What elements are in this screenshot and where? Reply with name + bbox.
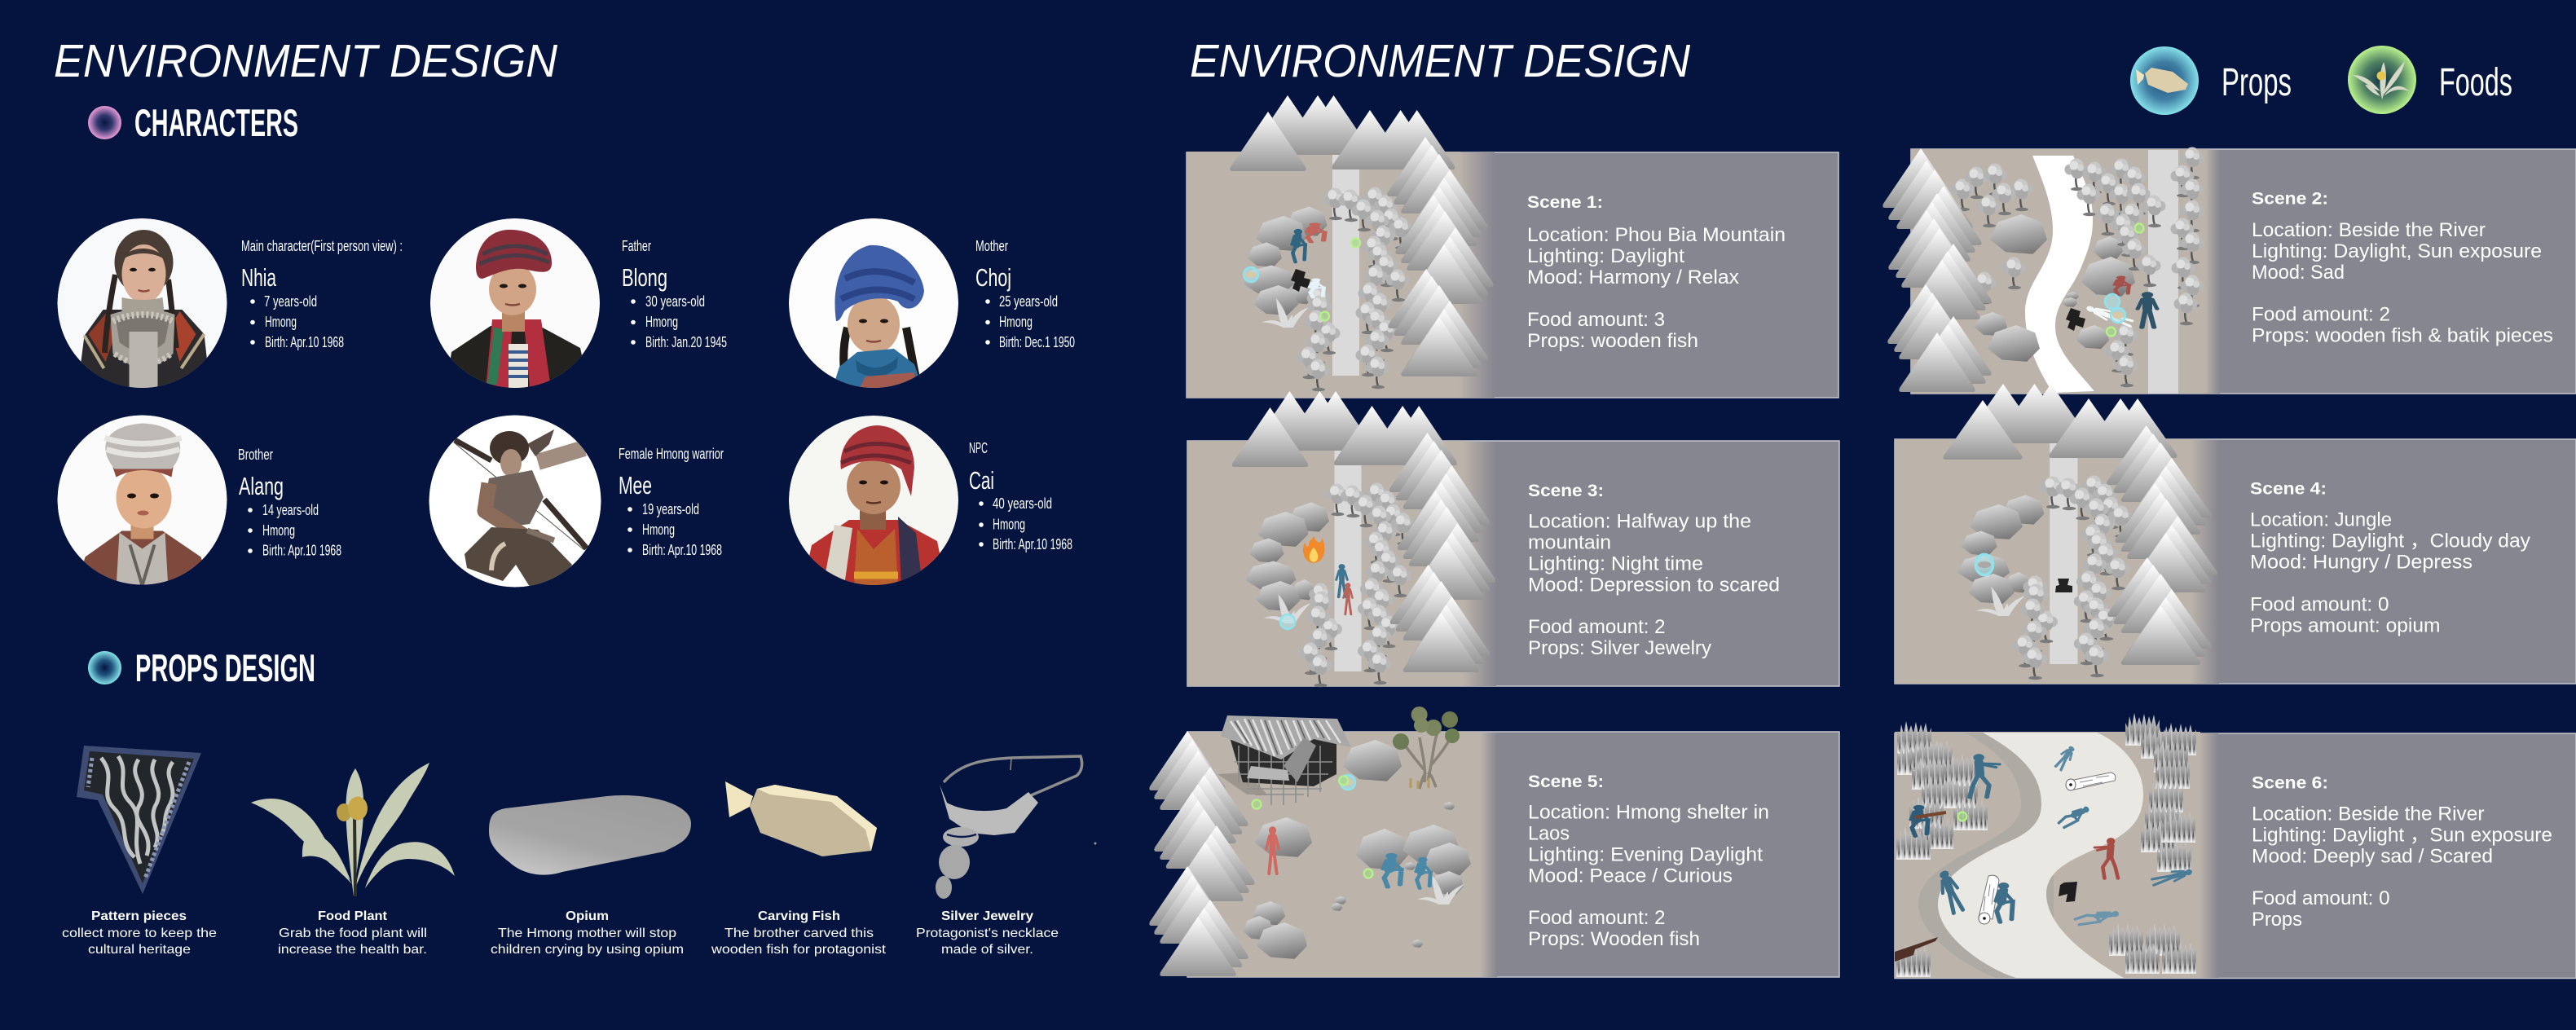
name: Cai <box>969 466 994 495</box>
scene 5 map <box>1149 706 1471 976</box>
prop caption: carving fish: The brother carved this <box>724 927 874 940</box>
character card: Along <box>57 416 341 590</box>
legend: foods: Foods <box>2439 61 2512 104</box>
prop caption: silver jewelry: made of silver. <box>941 943 1033 957</box>
scene 6 text: Location: Beside the River <box>2252 803 2484 825</box>
hut <box>1218 715 1351 805</box>
prop caption: silver jewelry: Silver Jewelry <box>941 909 1033 923</box>
details list: Birth: Apr.10 1968 <box>265 334 344 350</box>
scene 1 text <box>1527 193 1786 352</box>
scene 3 text: Mood: Depression to scared <box>1528 574 1780 596</box>
details list <box>250 293 344 350</box>
prop caption: carving fish: Carving Fish <box>758 909 840 923</box>
panel: scene 4 <box>1895 384 2576 684</box>
panel: scene 3 <box>1187 391 1839 687</box>
scene 4 text: Food amount: 0 <box>2250 594 2389 616</box>
prop caption: pattern pieces: cultural heritage <box>88 943 191 957</box>
prop caption: pattern pieces: collect more to keep the <box>62 927 217 940</box>
details list: 14 years-old <box>262 502 319 518</box>
scene 1 text: Lighting: Daylight <box>1527 245 1684 267</box>
scene 4 text: Scene 4: <box>2250 480 2327 499</box>
details list: Birth: Apr.10 1968 <box>993 536 1072 552</box>
details list <box>985 293 1075 350</box>
prop caption: opium: Opium <box>566 909 609 923</box>
details list: Hmong <box>262 522 295 539</box>
panel: scene 2 <box>1882 147 2576 394</box>
character card: Nhia <box>57 218 403 393</box>
scene 3 text: Lighting: Night time <box>1528 553 1703 575</box>
scene 2 map <box>1882 147 2204 394</box>
legend: props: Props <box>2222 61 2292 104</box>
prop caption: opium <box>491 909 684 957</box>
scene 6 text: Mood: Deeply sad / Scared <box>2252 846 2493 868</box>
scene 5 text: Scene 5: <box>1528 772 1604 791</box>
prop caption: food plant: increase the health bar. <box>278 943 427 957</box>
mangrove tree <box>1393 706 1460 789</box>
role: Main character(First person view) : <box>241 238 403 254</box>
details list <box>979 495 1072 552</box>
details list: 40 years-old <box>993 495 1052 512</box>
prop caption: carving fish <box>711 909 887 957</box>
character card: Mee <box>429 416 724 587</box>
panel: scene 6 <box>1895 713 2576 978</box>
log <box>2066 772 2116 790</box>
prop: food plant <box>251 763 455 896</box>
details list: 30 years-old <box>645 293 705 310</box>
portrait: Cai <box>789 416 958 590</box>
prop caption: opium: The Hmong mother will stop <box>498 927 676 940</box>
scene 3 text: Props: Silver Jewelry <box>1528 637 1711 659</box>
character card: Cai <box>789 416 1072 590</box>
scene 4 text <box>2250 480 2530 637</box>
details list: Hmong <box>642 522 675 538</box>
portrait: Mee <box>429 416 601 587</box>
details list: 7 years-old <box>264 293 317 310</box>
scene 2 text <box>2252 190 2553 347</box>
details list: 19 years-old <box>642 501 699 517</box>
scene 5 text: Props: Wooden fish <box>1528 928 1700 950</box>
scene 1 text: Props: wooden fish <box>1527 330 1698 352</box>
character card: Blong <box>430 218 727 393</box>
portrait: Blong <box>430 218 600 393</box>
details list: 25 years-old <box>999 293 1058 310</box>
scene 5 text: Food amount: 2 <box>1528 907 1666 929</box>
portrait: Choj <box>789 218 958 393</box>
details list <box>631 293 727 350</box>
title: right environment design: ENVIRONMENT DESIGN <box>1190 35 1691 87</box>
scene 3 text <box>1528 482 1780 659</box>
prop caption: opium: children crying by using opium <box>491 943 684 957</box>
icon: characters bullet <box>88 106 121 139</box>
prop caption: silver jewelry: Protagonist's necklace <box>916 927 1059 940</box>
scene 2 text: Lighting: Daylight, Sun exposure <box>2252 240 2542 262</box>
scene 5 text: Lighting: Evening Daylight <box>1528 844 1763 866</box>
scene 4 text: Lighting: Daylight ，Cloudy day <box>2250 530 2530 552</box>
prop caption: pattern pieces: Pattern pieces <box>91 909 187 923</box>
legend: props <box>2130 46 2292 115</box>
prop caption: carving fish: wooden fish for protagonist <box>711 943 887 957</box>
scene 3 text: Food amount: 2 <box>1528 616 1666 638</box>
portrait: Nhia <box>57 218 227 393</box>
character card: Choj <box>789 218 1075 393</box>
details list: Hmong <box>999 314 1033 330</box>
stray speck <box>1094 843 1097 844</box>
scene 4 text: Mood: Hungry / Depress <box>2250 552 2473 574</box>
scene 1 text: Scene 1: <box>1527 193 1603 212</box>
scene 2 text: Food amount: 2 <box>2252 304 2390 326</box>
scene 1 text: Location: Phou Bia Mountain <box>1527 224 1786 246</box>
role: NPC <box>969 440 988 456</box>
name: Mee <box>619 471 652 500</box>
panel: scene 5 <box>1149 706 1839 977</box>
name: Alang <box>239 472 284 500</box>
scene 6 text <box>2252 774 2552 931</box>
name: Blong <box>622 263 667 292</box>
heading: characters: CHARACTERS <box>134 101 298 144</box>
scene 6 text: Lighting: Daylight ，Sun exposure <box>2252 825 2552 847</box>
details list <box>627 501 722 558</box>
details list: Hmong <box>993 517 1025 533</box>
role: Mother <box>975 238 1008 254</box>
heading: props design: PROPS DESIGN <box>135 646 315 689</box>
scene 1 text: Mood: Harmony / Relax <box>1527 266 1739 288</box>
scene 1 text: Food amount: 3 <box>1527 309 1665 331</box>
scene 6 text: Food amount: 0 <box>2252 887 2390 909</box>
log <box>1979 875 1999 924</box>
prop: carving fish <box>725 781 877 856</box>
scene 1 map <box>1230 95 1494 391</box>
scene 3 text: mountain <box>1528 532 1611 554</box>
scene 3 text: Scene 3: <box>1528 482 1604 500</box>
prop: pattern pieces <box>77 746 201 894</box>
prop: silver jewelry <box>936 756 1082 899</box>
scene 2 text: Mood: Sad <box>2252 262 2345 284</box>
scene 5 text: Mood: Peace / Curious <box>1528 865 1733 887</box>
scene 4 text: Props amount: opium <box>2250 615 2440 637</box>
details list: Hmong <box>265 314 297 330</box>
scene 6 map <box>1895 713 2196 978</box>
details list: Birth: Jan.20 1945 <box>645 334 727 350</box>
name: Choj <box>975 263 1011 292</box>
details list: Birth: Dec.1 1950 <box>999 334 1075 350</box>
scene 5 text: Laos <box>1528 823 1570 845</box>
prop: opium <box>489 795 691 875</box>
scene 5 text <box>1528 772 1769 950</box>
title: left environment design: ENVIRONMENT DESIGN <box>54 35 558 87</box>
role: Father <box>622 238 651 254</box>
prop caption: food plant: Grab the food plant will <box>279 927 427 940</box>
scene 6 text: Scene 6: <box>2252 774 2328 793</box>
scene 5 text: Location: Hmong shelter in <box>1528 802 1769 824</box>
scene 2 text: Location: Beside the River <box>2252 219 2486 241</box>
prop caption: food plant: Food Plant <box>318 909 388 923</box>
scene 2 text: Scene 2: <box>2252 190 2328 209</box>
prop caption: food plant <box>278 909 427 957</box>
role: Female Hmong warrior <box>619 446 724 462</box>
prop caption: silver jewelry <box>916 909 1059 957</box>
legend: foods <box>2348 46 2512 114</box>
icon: props design bullet <box>88 651 121 684</box>
scene 4 map <box>1943 384 2217 680</box>
role: Brother <box>238 447 273 463</box>
scene 6 text: Props <box>2252 909 2302 931</box>
scene 4 text: Location: Jungle <box>2250 509 2392 531</box>
details list: Birth: Apr.10 1968 <box>642 542 722 558</box>
scene 3 text: Location: Halfway up the <box>1528 511 1751 533</box>
prop caption: pattern pieces <box>62 909 217 957</box>
details list <box>248 502 341 559</box>
panel: scene 1 <box>1187 95 1838 398</box>
scene 2 text: Props: wooden fish & batik pieces <box>2252 325 2553 347</box>
details list: Birth: Apr.10 1968 <box>262 543 341 559</box>
details list: Hmong <box>645 314 678 330</box>
name: Nhia <box>241 263 277 292</box>
portrait: Along <box>57 416 227 590</box>
scene 3 map <box>1232 391 1495 687</box>
